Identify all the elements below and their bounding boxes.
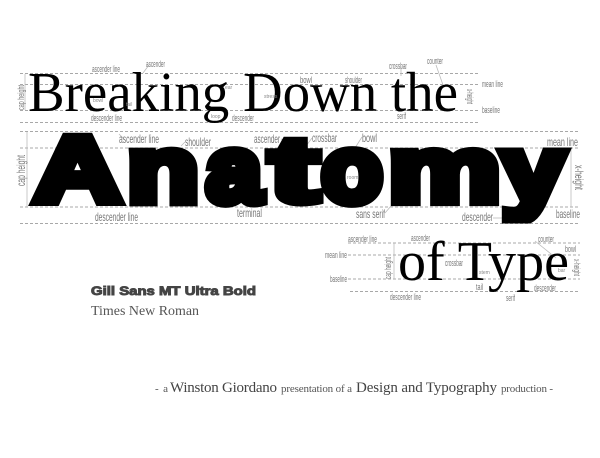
annotations: Anatomy: descender line: [95, 210, 138, 224]
annotations: Anatomy: [14, 131, 586, 224]
annotations: Breaking Down the: stress: [264, 94, 278, 100]
annotations: Breaking Down the: ascender line: [92, 64, 120, 74]
credit line: Design and Typography: [356, 380, 498, 396]
annotations: of Type: x-height: [572, 259, 582, 276]
heavy display word: Anatomy: [28, 132, 572, 224]
credit line: presentation of a: [281, 383, 352, 395]
annotations: Anatomy: descender: [462, 210, 493, 224]
annotations: Breaking Down the: cap height: [16, 85, 26, 110]
font legend: Times New Roman: Times New Roman: [91, 304, 199, 319]
annotations: Breaking Down the: shoulder: [345, 75, 362, 85]
annotations: Breaking Down the: ear: [225, 85, 233, 91]
annotations: Anatomy: mean line: [547, 135, 578, 149]
annotations: Anatomy: ascender line: [119, 132, 159, 146]
heavy display word: Anatomy: o: [322, 118, 382, 222]
subtitle: of Type: of Type: [398, 231, 569, 293]
annotations: Breaking Down the: bowl: [300, 75, 312, 85]
annotations: of Type: cap height: [383, 257, 393, 279]
annotations: of Type: mean line: [325, 250, 347, 260]
annotations: Breaking Down the: serif: [397, 111, 406, 121]
annotations: of Type: descender: [534, 283, 556, 293]
credit line: - a: [155, 383, 168, 395]
annotations: of Type: ascender line: [348, 234, 377, 244]
heavy display word: Anatomy: m: [388, 118, 501, 222]
annotations: Anatomy: bowl: [362, 131, 377, 145]
heavy display word: Anatomy: y: [502, 117, 564, 221]
annotations: Breaking Down the: descender: [232, 113, 254, 123]
annotations: Breaking Down the: crossbar: [389, 61, 407, 71]
annotations: Breaking Down the: mean line: [482, 79, 503, 89]
annotations: Breaking Down the: ascender: [146, 59, 165, 69]
annotations: of Type: counter: [538, 234, 554, 244]
annotations: Anatomy: baseline: [556, 207, 580, 221]
heavy display word: Anatomy: t: [269, 118, 319, 222]
annotations: Anatomy: sans serif: [356, 207, 385, 221]
annotations: of Type: stem: [479, 270, 490, 276]
annotations: of Type: serif: [506, 293, 515, 303]
annotations: of Type: crossbar: [445, 258, 463, 268]
annotations: of Type: [325, 233, 582, 303]
annotations: Anatomy: shoulder: [185, 135, 211, 149]
heavy display word: Anatomy: n: [127, 118, 199, 222]
annotations: Anatomy: cap height: [14, 155, 28, 186]
annotations: of Type: ascender: [411, 233, 430, 243]
annotations: Anatomy: crossbar: [312, 131, 337, 145]
heavy display word: Anatomy: a: [207, 118, 262, 222]
annotations: Breaking Down the: tail: [126, 102, 132, 108]
heavy display word: Anatomy: A: [34, 117, 121, 221]
credit line: [155, 380, 553, 396]
annotations: Breaking Down the: counter: [427, 56, 443, 66]
annotations: Breaking Down the: loop: [211, 114, 221, 120]
credit line: production -: [501, 383, 553, 395]
annotations: Breaking Down the: [16, 56, 503, 123]
font legend: Gill Sans MT Ultra Bold: Gill Sans MT Ultra Bold: [91, 284, 256, 298]
annotations: of Type: tail: [476, 282, 483, 292]
annotations: of Type: descender line: [390, 292, 421, 302]
annotations: Anatomy: x-height: [572, 165, 586, 190]
title: Breaking Down the: Breaking Down the: [28, 62, 458, 124]
annotations: Anatomy: terminal: [237, 206, 262, 220]
annotations: Anatomy: room: [347, 175, 358, 181]
annotations: of Type: baseline: [330, 274, 347, 284]
annotations: Breaking Down the: x-height: [465, 89, 475, 104]
annotations: of Type: bar: [558, 268, 566, 274]
annotations: Anatomy: ascender: [254, 132, 280, 146]
annotations: Breaking Down the: baseline: [482, 105, 500, 115]
annotations: of Type: bowl: [565, 244, 576, 254]
annotations: Breaking Down the: bowl: [93, 98, 103, 104]
credit line: Winston Giordano: [170, 380, 277, 396]
annotations: Breaking Down the: descender line: [91, 113, 122, 123]
